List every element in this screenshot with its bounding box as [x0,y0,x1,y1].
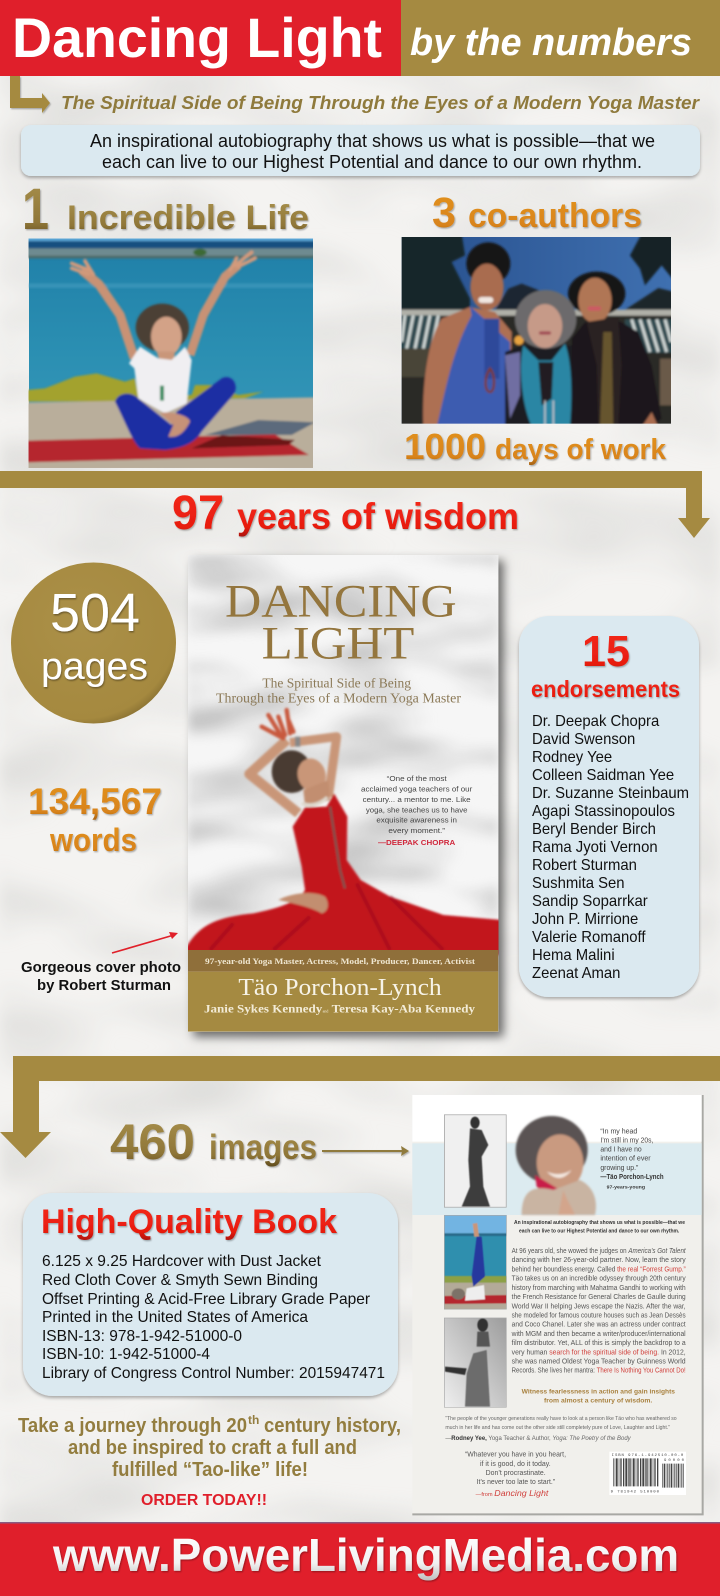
endorser list: Colleen Saidman Yee [532,767,674,784]
header banner [0,0,720,76]
back cover: barcode: 90000 [664,1459,685,1463]
back cover: synopsis: very human search for the spiritual side of being. In 2012, [512,1349,686,1356]
cover co-authors: Teresa Kay-Aba Kennedy [332,1004,475,1016]
back cover: dance photo [444,1318,507,1408]
back cover: headstand photo [442,1213,509,1311]
book back cover [412,1095,704,1515]
back cover: quote from Tao: intention of ever [600,1154,651,1163]
panel heading: High-Quality Book [41,1203,337,1241]
endorsements heading: endorsements [531,676,680,702]
intro callout: An inspirational autobiography that shows us what is possible—that we [90,131,655,151]
back cover: quote from Tao: I’m still in my 20s, [600,1135,653,1144]
call to action text: and be inspired to craft a full and [68,1437,357,1459]
heading: 3 co-authors: co-authors [468,197,642,235]
caption: cover photo credit: by Robert Sturman [37,977,171,994]
website URL: www.PowerLivingMedia.com [52,1529,679,1581]
endorser list: Rama Jyoti Vernon [532,839,658,856]
main title: Dancing Light [12,6,382,69]
back cover: closing quote: Don’t procrastinate. [486,1470,546,1477]
call to action text: century history, [264,1415,401,1437]
cover subtitle: The Spiritual Side of Being [262,675,411,690]
book front cover [187,555,502,1032]
stat: 134,567 words: 134,567 [28,781,162,822]
cover author: Täo Porchon-Lynch [238,975,442,1001]
back cover: closing quote: —from Dancing Light [476,1488,549,1498]
back cover: Rodney Yee quote: much in her life and has come out the other side still completely pure of Love, Laughter and Light.” [445,1425,670,1431]
cover quote [361,774,473,847]
back cover: synopsis: At 96 years old, she wowed the judges on America’s Got Talent [512,1248,687,1255]
back cover: synopsis [511,1248,687,1375]
endorser list: Dr. Deepak Chopra [532,713,660,730]
back cover: barcode: 9 781942 510000 [611,1491,660,1495]
call to action text: fulfilled “Tao-like” life! [112,1459,308,1481]
footer banner [0,1522,720,1596]
caption: cover photo credit [21,959,181,994]
back cover: barcode: ISBN 976-1-942510-00-0 [612,1454,684,1458]
specification list: ISBN-10: 1-942-51000-4 [42,1346,210,1363]
cover quote: “One of the most [387,774,447,783]
back cover: quote from Tao: and I have no [600,1145,642,1154]
back cover: quote from Tao [600,1126,664,1190]
stat: 134,567 words: words [49,822,137,858]
photo: yoga on the beach [27,237,315,470]
back cover: synopsis: and Coco Chanel. Later she was an actress under contract [512,1322,686,1329]
heading: 460 images: images [209,1128,317,1167]
endorser list: Agapi Stassinopoulos [532,803,675,820]
back cover: synopsis: with MGM and then became a writer/producer/international [511,1331,686,1338]
endorser list: David Swenson [532,731,635,748]
cover co-authors [204,1004,475,1015]
badge: 504 pages: 504 [50,583,140,643]
specification list: Printed in the United States of America [42,1309,308,1326]
endorser list: Dr. Suzanne Steinbaum [532,785,689,802]
endorser list: Beryl Bender Birch [532,821,656,838]
heading: 460 images: 460 [110,1114,195,1170]
back cover: synopsis: she modeled for famous couture houses such as Jean Dessès [512,1313,686,1320]
stat: 15: 15 [582,627,630,676]
arrow: book section to lower section [0,1056,720,1158]
back cover: synopsis: Täo takes us on an incredible odyssey through 20th century [512,1276,686,1283]
caption: cover photo credit: Gorgeous cover photo [21,959,181,976]
back cover: Rodney Yee quote: “The people of the younger generations really have to look at a person like Täo who has weathered so [445,1416,677,1422]
arrow: header to tagline [10,76,50,113]
back cover: gold tagline [522,1388,675,1405]
endorser list: Sushmita Sen [532,875,625,892]
heading: 97 years of wisdom: 97 [172,487,224,540]
endorser list [532,713,689,982]
cover descriptor strip: 97-year-old Yoga Master, Actress, Model, Producer, Dancer, Activist [205,957,475,966]
cover quote: exquisite awareness in [376,816,457,825]
endorser list: Zeenat Aman [532,965,620,982]
cover title: DANCING [225,576,457,628]
call to action text [18,1413,401,1481]
back cover: closing quote: It’s never too late to start.” [477,1479,556,1486]
heading: 3 co-authors [432,189,642,237]
order today: ORDER TODAY!! [141,1492,267,1509]
panel: high-quality book [23,1193,398,1396]
heading: 1 Incredible Life [22,177,309,242]
heading: 1000 days of work: 1000 [404,426,486,467]
cover co-authors: and [323,1009,328,1014]
tagline: The Spiritual Side of Being Through the Eyes of a Modern Yoga Master [61,92,701,113]
cover quote: yoga, she teaches us to have [366,805,467,814]
endorser list: John P. Mirrione [532,911,638,928]
heading: 97 years of wisdom: years of wisdom [237,496,519,537]
back cover: synopsis: history from marching with Mahatma Gandhi to working with [512,1285,686,1292]
endorser list: Hema Malini [532,947,615,964]
back cover: synopsis: behind her boundless energy. Called the real “Forrest Gump.” [512,1266,686,1273]
specification list [42,1253,385,1382]
arrow: to cover photo [112,932,178,953]
cover quote: century... a mentor to me. Like [363,795,471,804]
back cover: synopsis: Records. She lives her mantra: There Is Nothing You Cannot Do! [512,1368,686,1375]
back cover: summary headline: each can live to our Highest Potential and dance to our own rhythm. [519,1229,680,1235]
specification list: ISBN-13: 978-1-942-51000-0 [42,1328,242,1345]
back cover: synopsis: film distributor. Yet, ALL of this is simply the backdrop to a [512,1340,686,1347]
back cover: quote from Tao: 97-years-young [607,1185,645,1190]
cover subtitle [216,675,462,706]
intro callout: each can live to our Highest Potential and dance to our own rhythm. [102,152,642,172]
back cover: portrait [516,1116,596,1215]
specification list: 6.125 x 9.25 Hardcover with Dust Jacket [42,1253,322,1270]
call to action text: Take a journey through 20 [18,1415,247,1437]
call to action text: th [248,1413,259,1427]
back cover: gown photo [444,1114,507,1208]
heading: 1 Incredible Life: Incredible Life [67,199,309,237]
panel: endorsements [519,616,699,997]
subtitle: by the numbers: by the numbers [410,22,692,64]
cover quote: —DEEPAK CHOPRA [378,838,456,847]
specification list: Offset Printing & Acid-Free Library Grade Paper [42,1291,371,1308]
heading: 3 co-authors: 3 [432,189,456,237]
badge: 504 pages [11,562,176,724]
back cover: quote from Tao: growing up.” [600,1163,639,1172]
heading: 97 years of wisdom [172,487,519,540]
cover quote: acclaimed yoga teachers of our [361,785,473,794]
endorser list: Valerie Romanoff [532,929,646,946]
intro callout [21,125,700,176]
back cover: synopsis: World War II helping Jews escape the Nazis. After the war, [512,1303,686,1310]
cover quote: every moment.” [388,826,446,835]
stat: 134,567 words [28,781,162,858]
heading: 1000 days of work: days of work [495,434,667,466]
cover title: LIGHT [262,617,414,669]
back cover: quote from Tao: —Täo Porchon-Lynch [600,1172,664,1181]
badge: 504 pages: pages [41,646,148,688]
back cover: barcode [609,1452,686,1495]
cover photo: dancer in red dress [187,710,502,955]
arrow: images to back cover [322,1146,409,1156]
back cover: closing quote: “Whatever you have in you heart, [465,1452,566,1459]
back cover: synopsis: the French Resistance for General Charles de Gaulle during [512,1294,686,1301]
endorser list: Rodney Yee [532,749,612,766]
back cover: closing quote [465,1452,566,1498]
back cover: Rodney Yee quote [445,1416,677,1442]
back cover: closing quote: if it is good, do it today. [480,1461,551,1468]
back cover: synopsis: she was named Oldest Yoga Teacher by Guinness World [512,1358,686,1365]
specification list: Red Cloth Cover & Smyth Sewn Binding [42,1272,318,1289]
endorser list: Sandip Soparrkar [532,893,648,910]
cover co-authors: Janie Sykes Kennedy [204,1004,323,1016]
heading: 460 images [110,1114,317,1170]
back cover: summary headline: An inspirational autobiography that shows us what is possible—that we [514,1220,685,1226]
back cover: synopsis: dancing with her 26-year-old partner. Now, learn the story [512,1257,686,1264]
specification list: Library of Congress Control Number: 2015947471 [42,1365,385,1382]
cover title [226,586,456,659]
back cover: quote from Tao: “In my head [600,1126,637,1135]
back cover: summary headline [514,1220,685,1235]
photo: three co-authors [398,234,675,427]
heading: 1 Incredible Life: 1 [22,177,49,242]
arrow: top section to book section [0,471,710,538]
heading: 1000 days of work [404,426,667,467]
endorser list: Robert Sturman [532,857,637,874]
back cover: Rodney Yee quote: —Rodney Yee, Yoga Teacher & Author, Yoga: The Poetry of the Body [445,1436,632,1442]
back cover: gold tagline: Witness fearlessness in action and gain insights [522,1388,675,1395]
cover subtitle: Through the Eyes of a Modern Yoga Master [216,691,462,706]
back cover: gold tagline: from almost a century of wisdom. [544,1398,652,1405]
